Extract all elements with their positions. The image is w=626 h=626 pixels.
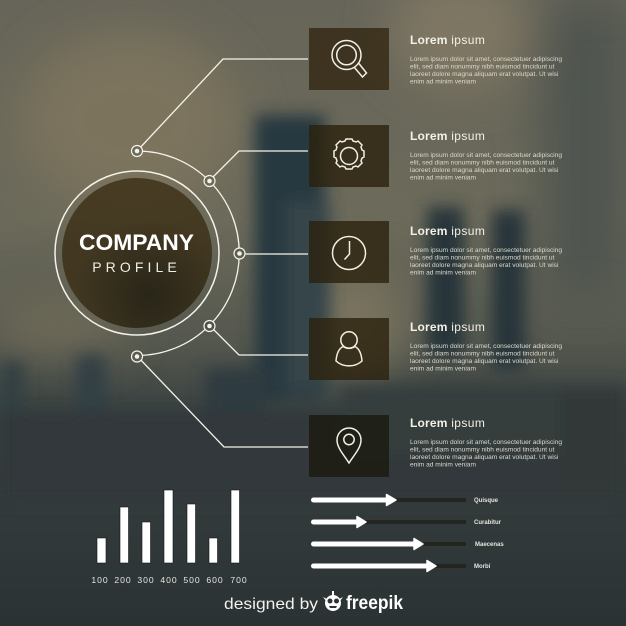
text block: item 1: enim ad minim veniam xyxy=(410,78,476,86)
arrow: curabitur: Curabitur xyxy=(474,520,502,526)
heading: profile: PROFILE xyxy=(92,259,181,275)
arrow progress chart xyxy=(314,494,504,572)
title: item 5: Lorem ipsum xyxy=(410,416,485,430)
text block: item 4: elit, sed diam nonummy nibh euismod tincidunt ut xyxy=(410,350,555,358)
node: 4 xyxy=(204,320,215,332)
text block: item 2: elit, sed diam nonummy nibh euismod tincidunt ut xyxy=(410,160,555,166)
arrow: maecenas: Maecenas xyxy=(475,542,504,548)
text block: item 5: enim ad minim veniam xyxy=(410,462,476,468)
arrow: quisque xyxy=(314,494,499,506)
text block: item 5: Lorem ipsum dolor sit amet, consectetuer adipiscing xyxy=(410,439,562,446)
text block: item 5: elit, sed diam nonummy nibh euismod tincidunt ut xyxy=(410,446,555,454)
arrow: curabitur xyxy=(314,516,502,528)
title: item 2: Lorem ipsum xyxy=(410,129,485,143)
chart axis labels: 100 xyxy=(91,575,109,585)
title: item 4: Lorem ipsum xyxy=(410,320,485,334)
freepik wordmark: freepik xyxy=(346,593,403,614)
panel: location item xyxy=(309,415,562,477)
chart axis labels: 500 xyxy=(183,575,201,585)
icon: gear xyxy=(334,139,364,169)
icon: person xyxy=(336,332,362,366)
bar chart xyxy=(91,490,248,585)
panel: settings item xyxy=(309,125,562,187)
node: 1 xyxy=(132,146,142,156)
text block: item 1: elit, sed diam nonummy nibh euismod tincidunt ut xyxy=(410,64,555,70)
icon: clock xyxy=(332,236,366,270)
node: 3 xyxy=(234,248,245,259)
text block: item 2: Lorem ipsum dolor sit amet, consectetuer adipiscing xyxy=(410,152,562,159)
icon: map pin xyxy=(337,428,361,463)
chart axis labels: 600 xyxy=(206,575,224,585)
text block: item 1: Lorem ipsum dolor sit amet, consectetuer adipiscing xyxy=(410,56,562,63)
connector lines and arc xyxy=(132,59,308,447)
chart axis labels: 700 xyxy=(230,575,248,585)
text block: item 1: laoreet dolore magna aliquam erat volutpat. Ut wisi xyxy=(410,71,559,78)
text block: item 5: laoreet dolore magna aliquam erat volutpat. Ut wisi xyxy=(410,454,559,461)
text block: item 3: laoreet dolore magna aliquam erat volutpat. Ut wisi xyxy=(410,262,559,269)
heading: company: COMPANY xyxy=(79,230,194,255)
freepik credit xyxy=(224,591,403,614)
node: 2 xyxy=(204,176,215,186)
text block: item 3: Lorem ipsum dolor sit amet, consectetuer adipiscing xyxy=(410,247,562,254)
arrow: quisque: Quisque xyxy=(474,498,499,504)
panel: search item xyxy=(309,28,562,90)
arrow: morbi xyxy=(314,560,491,572)
icon: freepik mascot xyxy=(323,591,343,611)
panel: company circle xyxy=(55,171,219,335)
chart axis labels: 200 xyxy=(114,575,132,585)
chart axis labels: 400 xyxy=(160,575,178,585)
chart axis labels xyxy=(91,575,248,585)
freepik credit: designed by xyxy=(224,596,318,613)
text block: item 4: enim ad minim veniam xyxy=(410,366,476,372)
text block: item 4: laoreet dolore magna aliquam erat volutpat. Ut wisi xyxy=(410,358,559,365)
text block: item 3: enim ad minim veniam xyxy=(410,270,476,276)
text block: item 2: laoreet dolore magna aliquam erat volutpat. Ut wisi xyxy=(410,167,559,174)
arrow: morbi: Morbi xyxy=(474,564,491,570)
node: 5 xyxy=(132,351,142,362)
text block: item 3: elit, sed diam nonummy nibh euismod tincidunt ut xyxy=(410,254,555,262)
title: item 3: Lorem ipsum xyxy=(410,224,485,238)
title: item 1: Lorem ipsum xyxy=(410,33,485,47)
text block: item 4: Lorem ipsum dolor sit amet, consectetuer adipiscing xyxy=(410,343,562,350)
text block: item 2: enim ad minim veniam xyxy=(410,174,476,182)
arrow: maecenas xyxy=(314,538,504,550)
icon: magnifier xyxy=(332,40,366,77)
panel: time item xyxy=(309,221,562,283)
panel: person item xyxy=(309,318,562,380)
chart axis labels: 300 xyxy=(137,575,155,585)
